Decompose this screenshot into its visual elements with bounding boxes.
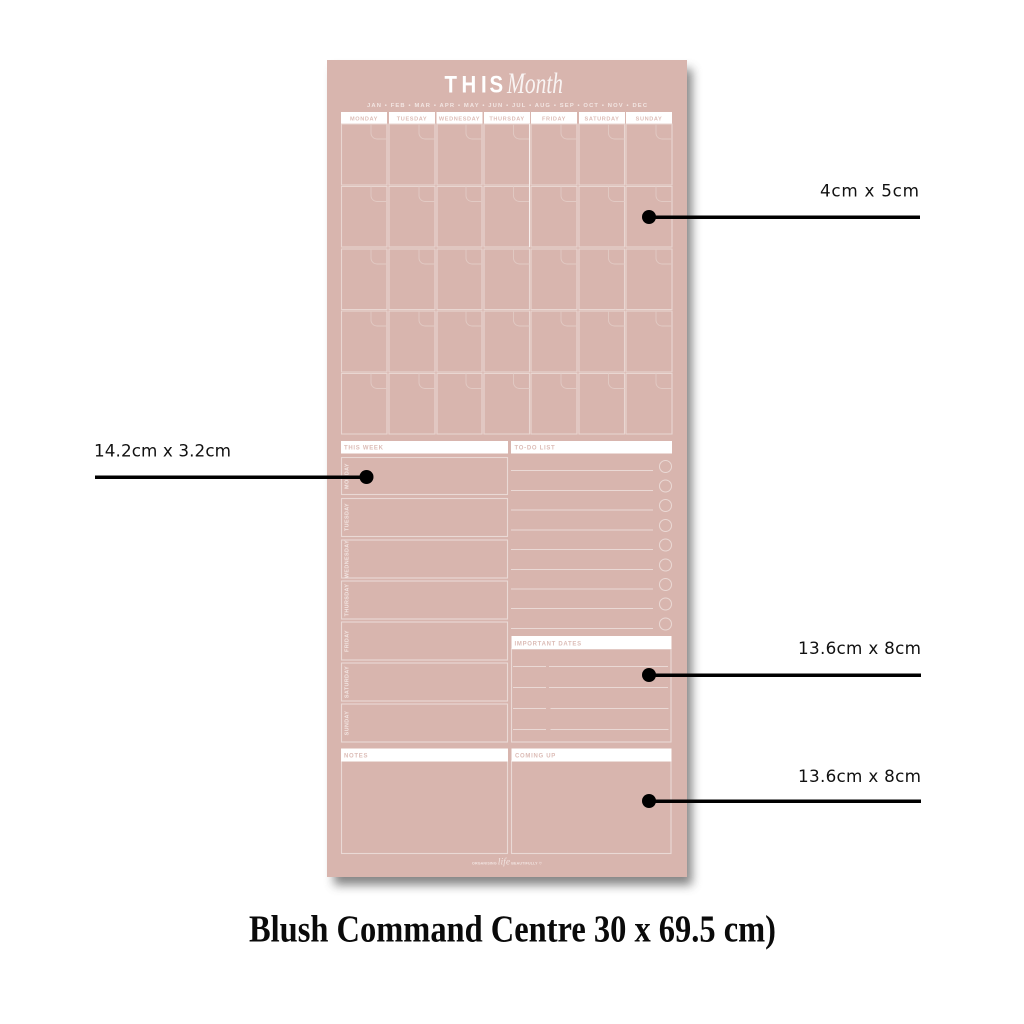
panel: blush planner	[327, 60, 687, 877]
month list: JAN • FEB • MAR • APR • MAY • JUN • JUL • AUG • SEP • OCT • NOV • DEC	[367, 103, 648, 109]
calendar row 1	[342, 124, 672, 185]
callout: this week row size	[94, 440, 374, 484]
panel: important dates	[512, 636, 672, 742]
weekday headers: TUESDAY	[397, 116, 427, 122]
calendar row 4	[342, 311, 672, 372]
panel: this week: MONDAY	[344, 463, 350, 489]
weekday headers: WEDNESDAY	[439, 116, 480, 122]
weekday headers: THURSDAY	[489, 116, 525, 122]
callout: calendar cell size: 4cm x 5cm	[820, 181, 919, 201]
weekday headers: MONDAY	[350, 116, 378, 122]
weekday headers: FRIDAY	[542, 116, 566, 122]
panel: this week: THIS WEEK	[344, 446, 384, 452]
calendar row 2	[342, 186, 672, 247]
callout: coming up size: 13.6cm x 8cm	[798, 766, 921, 786]
panel: this week: TUESDAY	[344, 503, 350, 531]
panel: coming up	[512, 748, 672, 854]
calendar row 5	[342, 374, 672, 434]
panel: notes	[341, 748, 508, 854]
weekday headers: SUNDAY	[636, 116, 662, 122]
callout: important dates size: 13.6cm x 8cm	[798, 638, 921, 658]
footer brand: ORGANISING life BEAUTIFULLY ♡	[472, 856, 543, 866]
planner shadow	[334, 69, 692, 885]
panel: this week: WEDNESDAY	[344, 540, 350, 578]
callout: this week row size: 14.2cm x 3.2cm	[94, 440, 231, 460]
panel: to-do list	[511, 441, 672, 630]
heading: this month: Month	[506, 67, 563, 100]
panel: important dates: IMPORTANT DATES	[514, 642, 582, 648]
heading: this month	[444, 67, 563, 100]
panel: notes: NOTES	[344, 754, 368, 760]
panel: to-do list: TO-DO LIST	[514, 446, 555, 452]
panel: coming up: COMING UP	[515, 754, 556, 760]
callout: calendar cell size	[642, 181, 920, 224]
heading: this month: THIS	[444, 71, 503, 98]
weekday headers: SATURDAY	[585, 116, 619, 122]
product title: Blush Command Centre 30 x 69.5 cm)	[249, 908, 776, 950]
callout: important dates size	[642, 638, 921, 682]
calendar row 3	[342, 249, 672, 310]
panel: this week: THURSDAY	[344, 584, 350, 616]
panel: this week: SATURDAY	[344, 666, 350, 698]
weekday headers	[341, 112, 672, 124]
panel: this week	[341, 441, 508, 742]
panel: this week: SUNDAY	[344, 711, 350, 735]
callout: coming up size	[642, 766, 921, 808]
panel: this week: FRIDAY	[344, 630, 350, 652]
